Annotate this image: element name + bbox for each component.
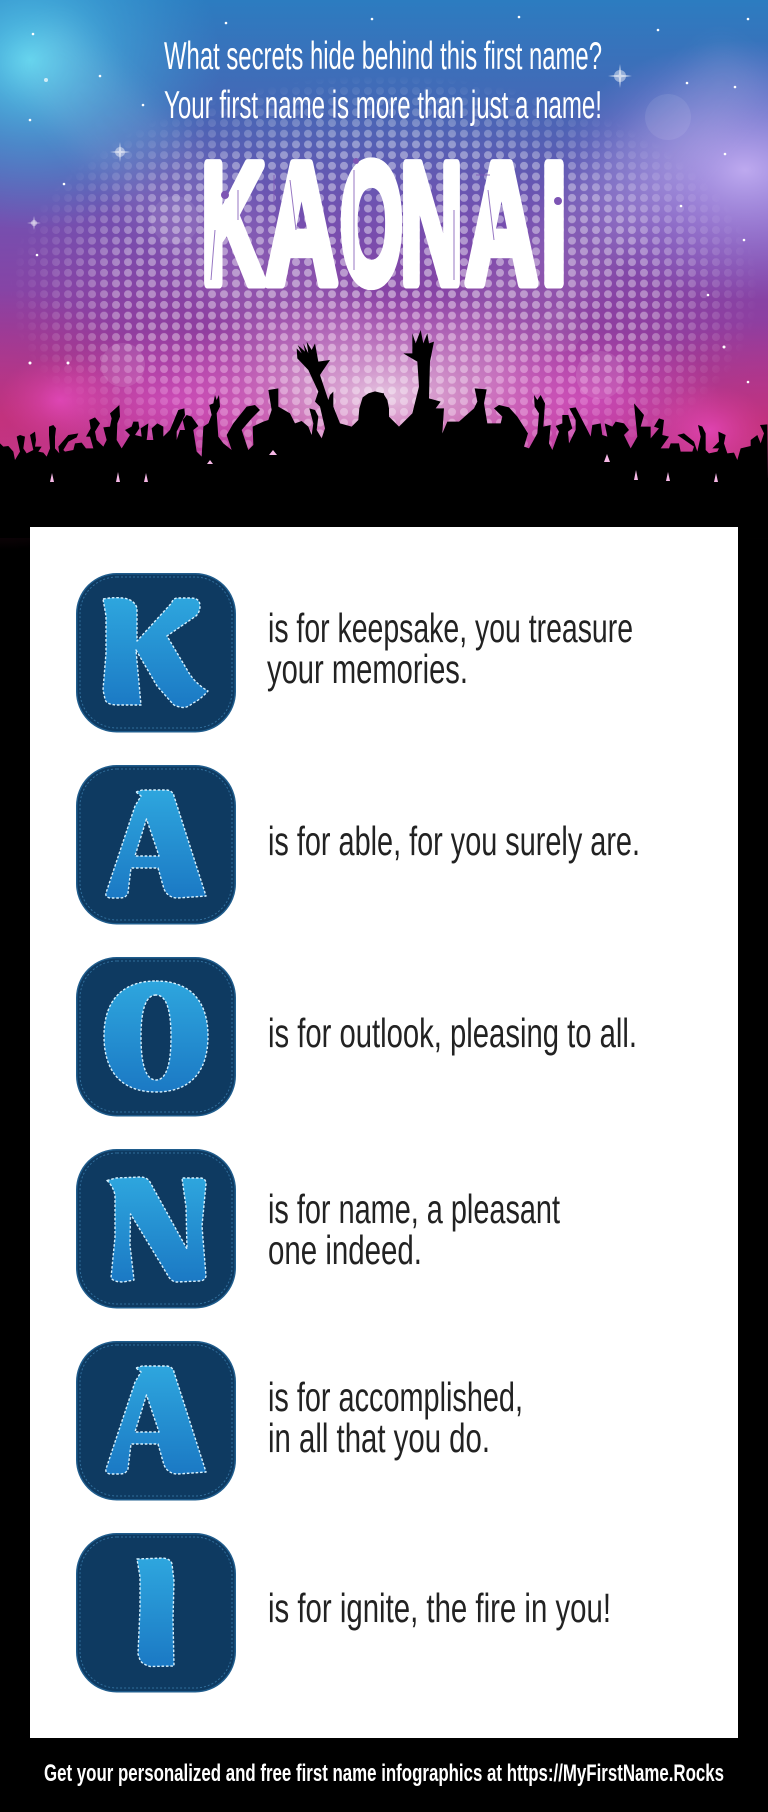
icon: letter A (77, 1342, 235, 1500)
sparkle: upper right (608, 64, 632, 88)
row: K (77, 574, 633, 732)
name title: KAONAI: I (541, 128, 567, 320)
text: N line: one indeed. (268, 1227, 422, 1273)
icon: letter N (77, 1150, 235, 1308)
header background: stage lights (0, 0, 768, 550)
crowd silhouette (0, 330, 768, 538)
text: A line: in all that you do. (268, 1415, 490, 1461)
name title: KAONAI: A (465, 128, 538, 320)
sparkle: far left (27, 216, 41, 230)
text: A line (268, 1374, 523, 1461)
decorative stars (27, 16, 749, 383)
icon: letter I (77, 1534, 235, 1692)
text: K line: your memories. (267, 646, 468, 692)
icon: letter K (77, 574, 235, 732)
text: N line: is for name, a pleasant (268, 1186, 560, 1232)
row: A (77, 766, 640, 924)
heading text (164, 35, 602, 127)
text: N line (268, 1186, 560, 1273)
text: A line: is for accomplished, (268, 1374, 523, 1420)
icon: letter A (77, 766, 235, 924)
name title: KAONAI: K (201, 128, 265, 320)
name title: KAONAI: A (265, 128, 338, 320)
row: A (second) (77, 1342, 523, 1500)
text: K line (267, 605, 633, 692)
sparkle: left (110, 142, 130, 162)
row: I (77, 1534, 611, 1692)
text: I line: is for ignite, the fire in you! (268, 1585, 611, 1631)
name title: KAONAI: N (400, 128, 463, 320)
row: O (77, 958, 637, 1116)
white content panel (30, 527, 738, 1738)
row: N (77, 1150, 560, 1308)
name title: KAONAI: O (340, 128, 403, 320)
icon: letter O (77, 958, 235, 1116)
name title: KAONAI (201, 128, 567, 320)
